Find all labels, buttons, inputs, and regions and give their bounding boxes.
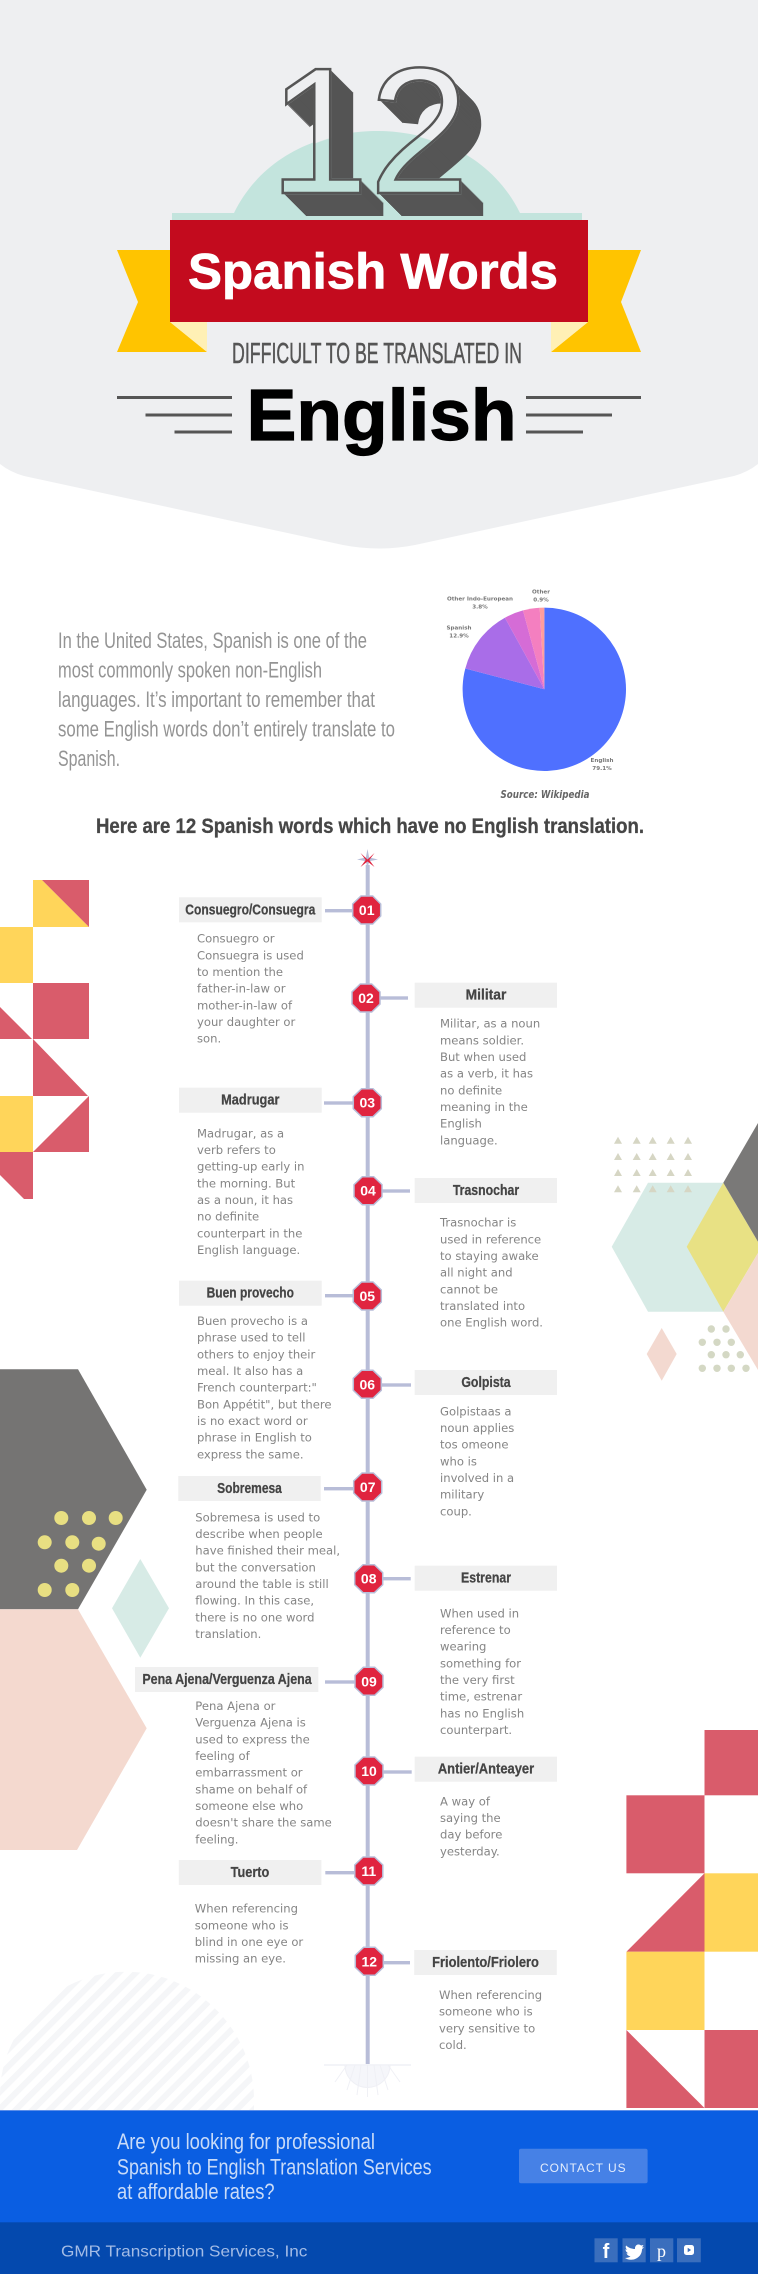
- item 02: Militar: no definite: [440, 1083, 502, 1097]
- item 03: Madrugar: counterpart in the: [197, 1226, 302, 1240]
- social icons: [594, 2238, 701, 2263]
- item 08: Estrenar: counterpart.: [440, 1723, 512, 1737]
- red banner with title: Spanish Words: [188, 244, 558, 300]
- item 10: Antier/Anteayer: yesterday.: [440, 1844, 500, 1858]
- item 05: Buen provecho: is no exact word or: [197, 1414, 308, 1428]
- item 03: Madrugar: verb refers to: [197, 1143, 276, 1157]
- item 06: Golpista: coup.: [440, 1504, 472, 1518]
- pie chart: languages spoken in the United States: Other Indo-European: [447, 596, 513, 602]
- social icons: f: [603, 2241, 610, 2263]
- item 05: Buen provecho: others to enjoy their: [197, 1347, 316, 1361]
- item 06: Golpista: noun applies: [440, 1421, 514, 1435]
- item 07: Sobremesa: 07: [360, 1479, 376, 1495]
- pie chart: languages spoken in the United States: English: [591, 758, 613, 764]
- item 02: Militar: language.: [440, 1133, 498, 1147]
- item 04: Trasnochar: Trasnochar: [453, 1182, 519, 1199]
- item 01: Consuegro/Consuegra: son.: [197, 1032, 221, 1046]
- mint semicircle behind the number: [172, 131, 582, 221]
- decoration: top-left tiles: [0, 880, 89, 1199]
- decoration: left hexagons and dots: [0, 1369, 169, 1850]
- item 05: Buen provecho: Bon Appétit", but there: [197, 1397, 332, 1411]
- item 12: Friolento/Friolero: When referencing: [439, 1988, 542, 2002]
- item 12: Friolento/Friolero: very sensitive to: [439, 2021, 535, 2035]
- item 10: Antier/Anteayer: 10: [361, 1763, 377, 1779]
- pie chart: languages spoken in the United States: 79.1%: [592, 766, 612, 772]
- item 03: Madrugar: Madrugar, as a: [197, 1126, 284, 1140]
- item 03: Madrugar: Madrugar: [221, 1092, 280, 1109]
- item 11: Tuerto: [179, 1857, 383, 1966]
- item 09: Pena Ajena/Verguenza Ajena: [135, 1667, 383, 1846]
- item 06: Golpista: military: [440, 1488, 484, 1502]
- item 04: Trasnochar: one English word.: [440, 1316, 543, 1330]
- item 12: Friolento/Friolero: 12: [362, 1953, 377, 1969]
- item 08: Estrenar: has no English: [440, 1706, 524, 1720]
- item 07: Sobremesa: [178, 1473, 382, 1641]
- word: English: English: [246, 376, 516, 456]
- item 01: Consuegro/Consuegra: Consuegra is used: [197, 948, 304, 962]
- item 05: Buen provecho: phrase in English to: [197, 1431, 312, 1445]
- item 03: Madrugar: English language.: [197, 1243, 300, 1257]
- item 01: Consuegro/Consuegra: to mention the: [197, 965, 283, 979]
- item 07: Sobremesa: have finished their meal,: [195, 1544, 340, 1558]
- item 02: Militar: meaning in the: [440, 1100, 528, 1114]
- call to action band: [0, 2110, 758, 2222]
- item 06: Golpista: involved in a: [440, 1471, 514, 1485]
- item 06: Golpista: 06: [360, 1376, 375, 1392]
- item 11: Tuerto: 11: [361, 1863, 376, 1879]
- item 07: Sobremesa: translation.: [195, 1627, 261, 1641]
- item 07: Sobremesa: Sobremesa is used to: [195, 1510, 320, 1524]
- item 02: Militar: as a verb, it has: [440, 1067, 533, 1081]
- item 05: Buen provecho: phrase used to tell: [197, 1331, 305, 1345]
- decoration: bottom-left striped circle: [0, 1972, 254, 2110]
- item 09: Pena Ajena/Verguenza Ajena: feeling of: [195, 1749, 251, 1763]
- item 08: Estrenar: time, estrenar: [440, 1690, 522, 1704]
- footer band: [0, 2222, 758, 2274]
- item 05: Buen provecho: [179, 1281, 381, 1461]
- item 02: Militar: But when used: [440, 1050, 526, 1064]
- item 03: Madrugar: no definite: [197, 1210, 259, 1224]
- item 06: Golpista: who is: [440, 1454, 477, 1468]
- contact button: [519, 2149, 648, 2183]
- item 12: Friolento/Friolero: [355, 1947, 557, 2052]
- item 09: Pena Ajena/Verguenza Ajena: Verguenza Ajena is: [195, 1716, 306, 1730]
- item 07: Sobremesa: but the conversation: [195, 1560, 316, 1574]
- item 10: Antier/Anteayer: A way of: [440, 1794, 491, 1808]
- item 06: Golpista: [353, 1370, 557, 1518]
- call to action band: Spanish to English Translation Services: [117, 2154, 432, 2179]
- subtitle: DIFFICULT TO BE TRANSLATED IN: [232, 338, 522, 370]
- item 01: Consuegro/Consuegra: mother-in-law of: [197, 998, 293, 1012]
- intro paragraph: In the United States, Spanish is one of the: [58, 628, 367, 653]
- item 10: Antier/Anteayer: [355, 1757, 557, 1858]
- item 05: Buen provecho: express the same.: [197, 1447, 304, 1461]
- item 02: Militar: [352, 983, 557, 1147]
- item 07: Sobremesa: describe when people: [195, 1527, 323, 1541]
- item 06: Golpista: Golpistaas a: [440, 1404, 512, 1418]
- item 09: Pena Ajena/Verguenza Ajena: 09: [361, 1673, 377, 1689]
- item 06: Golpista: tos omeone: [440, 1438, 508, 1452]
- item 09: Pena Ajena/Verguenza Ajena: doesn't share the same: [195, 1816, 332, 1830]
- pie chart: languages spoken in the United States: 12.9%: [449, 634, 469, 640]
- item 11: Tuerto: someone who is: [195, 1918, 289, 1932]
- item 12: Friolento/Friolero: someone who is: [439, 2005, 533, 2019]
- item 01: Consuegro/Consuegra: your daughter or: [197, 1015, 295, 1029]
- intro paragraph: languages. It’s important to remember that: [58, 687, 375, 712]
- item 01: Consuegro/Consuegra: Consuegro or: [197, 932, 275, 946]
- item 09: Pena Ajena/Verguenza Ajena: embarrassment or: [195, 1766, 303, 1780]
- item 04: Trasnochar: [354, 1177, 557, 1330]
- icon: flag star on top of the timeline: [357, 849, 378, 870]
- item 09: Pena Ajena/Verguenza Ajena: used to express the: [195, 1732, 310, 1746]
- item 04: Trasnochar: to staying awake: [440, 1249, 539, 1263]
- item 04: Trasnochar: used in reference: [440, 1232, 541, 1246]
- header background panel: [0, 0, 758, 548]
- item 08: Estrenar: something for: [440, 1656, 521, 1670]
- item 01: Consuegro/Consuegra: Consuegro/Consuegra: [185, 901, 316, 918]
- icon: timeline base ornament: [324, 2065, 411, 2097]
- item 01: Consuegro/Consuegra: 01: [359, 902, 375, 918]
- pie chart: languages spoken in the United States: [446, 590, 626, 772]
- item 02: Militar: means soldier.: [440, 1033, 524, 1047]
- item 09: Pena Ajena/Verguenza Ajena: feeling.: [195, 1832, 238, 1846]
- item 03: Madrugar: the morning. But: [197, 1176, 296, 1190]
- red banner with title: [170, 220, 588, 322]
- item 04: Trasnochar: translated into: [440, 1299, 525, 1313]
- timeline connectors: [324, 909, 412, 1964]
- item 08: Estrenar: 08: [361, 1571, 377, 1587]
- item 07: Sobremesa: Sobremesa: [217, 1480, 282, 1497]
- item 08: Estrenar: reference to: [440, 1623, 511, 1637]
- item 02: Militar: English: [440, 1117, 482, 1131]
- decoration: bottom-right tiles: [626, 1730, 758, 2108]
- pie chart: languages spoken in the United States: Spanish: [446, 626, 472, 632]
- item 04: Trasnochar: all night and: [440, 1266, 513, 1280]
- call to action band: at affordable rates?: [117, 2179, 275, 2204]
- item 09: Pena Ajena/Verguenza Ajena: Pena Ajena/Verguenza Ajena: [142, 1671, 312, 1688]
- item 08: Estrenar: When used in: [440, 1606, 519, 1620]
- contact button: CONTACT US: [540, 2161, 626, 2175]
- item 08: Estrenar: the very first: [440, 1673, 515, 1687]
- item 08: Estrenar: wearing: [440, 1640, 486, 1654]
- item 05: Buen provecho: Buen provecho: [207, 1285, 294, 1302]
- footer band: GMR Transcription Services, Inc: [61, 2244, 307, 2261]
- item 09: Pena Ajena/Verguenza Ajena: shame on behalf of: [195, 1782, 308, 1796]
- item 03: Madrugar: [179, 1088, 381, 1257]
- call to action band: Are you looking for professional: [117, 2129, 375, 2154]
- item 10: Antier/Anteayer: saying the: [440, 1811, 501, 1825]
- social icons: p: [657, 2241, 666, 2261]
- item 01: Consuegro/Consuegra: father-in-law or: [197, 982, 286, 996]
- pie chart: languages spoken in the United States: Other: [532, 590, 550, 596]
- yellow ribbon tails: [117, 250, 641, 352]
- item 06: Golpista: Golpista: [461, 1374, 511, 1391]
- item 02: Militar: Militar: [466, 987, 506, 1004]
- section heading: Here are 12 Spanish words which have no English translation.: [96, 814, 644, 838]
- intro paragraph: [58, 628, 395, 771]
- item 07: Sobremesa: there is no one word: [195, 1610, 314, 1624]
- intro paragraph: most commonly spoken non-English: [58, 658, 322, 682]
- item 05: Buen provecho: Buen provecho is a: [197, 1314, 308, 1328]
- decoration: right hexagons and triangles: [612, 1123, 758, 1381]
- item 01: Consuegro/Consuegra: [179, 896, 381, 1046]
- item 03: Madrugar: as a noun, it has: [197, 1193, 293, 1207]
- intro paragraph: Spanish.: [58, 746, 120, 771]
- pie chart source: Source: Wikipedia: [500, 788, 590, 801]
- item 04: Trasnochar: Trasnochar is: [439, 1216, 516, 1230]
- item 11: Tuerto: Tuerto: [231, 1864, 269, 1881]
- item 10: Antier/Anteayer: Antier/Anteayer: [438, 1761, 534, 1778]
- pie chart: languages spoken in the United States: 3.8%: [472, 604, 488, 610]
- timeline spine: [366, 865, 370, 2064]
- item 03: Madrugar: 03: [360, 1095, 375, 1111]
- item 12: Friolento/Friolero: cold.: [439, 2038, 467, 2052]
- item 08: Estrenar: Estrenar: [461, 1570, 511, 1587]
- item 04: Trasnochar: 04: [360, 1183, 376, 1199]
- item 07: Sobremesa: flowing. In this case,: [195, 1594, 314, 1608]
- item 05: Buen provecho: meal. It also has a: [197, 1364, 303, 1378]
- pie chart: languages spoken in the United States: 0.9%: [533, 598, 549, 604]
- intro paragraph: some English words don’t entirely translate to: [58, 716, 395, 742]
- item 02: Militar: Militar, as a noun: [440, 1017, 540, 1031]
- speed lines beside English: [117, 396, 641, 434]
- item 07: Sobremesa: around the table is still: [195, 1577, 329, 1591]
- item 05: Buen provecho: French counterpart:": [197, 1381, 317, 1395]
- item 12: Friolento/Friolero: Friolento/Friolero: [432, 1954, 539, 1971]
- item 02: Militar: 02: [358, 990, 374, 1006]
- item 09: Pena Ajena/Verguenza Ajena: Pena Ajena or: [195, 1699, 276, 1713]
- item 11: Tuerto: missing an eye.: [195, 1952, 286, 1966]
- item 04: Trasnochar: cannot be: [440, 1282, 498, 1296]
- item 11: Tuerto: blind in one eye or: [195, 1935, 303, 1949]
- item 11: Tuerto: When referencing: [195, 1902, 298, 1916]
- item 03: Madrugar: getting-up early in: [197, 1160, 304, 1174]
- item 08: Estrenar: [355, 1565, 557, 1737]
- item 09: Pena Ajena/Verguenza Ajena: someone else who: [195, 1799, 303, 1813]
- item 10: Antier/Anteayer: day before: [440, 1828, 502, 1842]
- item 05: Buen provecho: 05: [360, 1288, 375, 1304]
